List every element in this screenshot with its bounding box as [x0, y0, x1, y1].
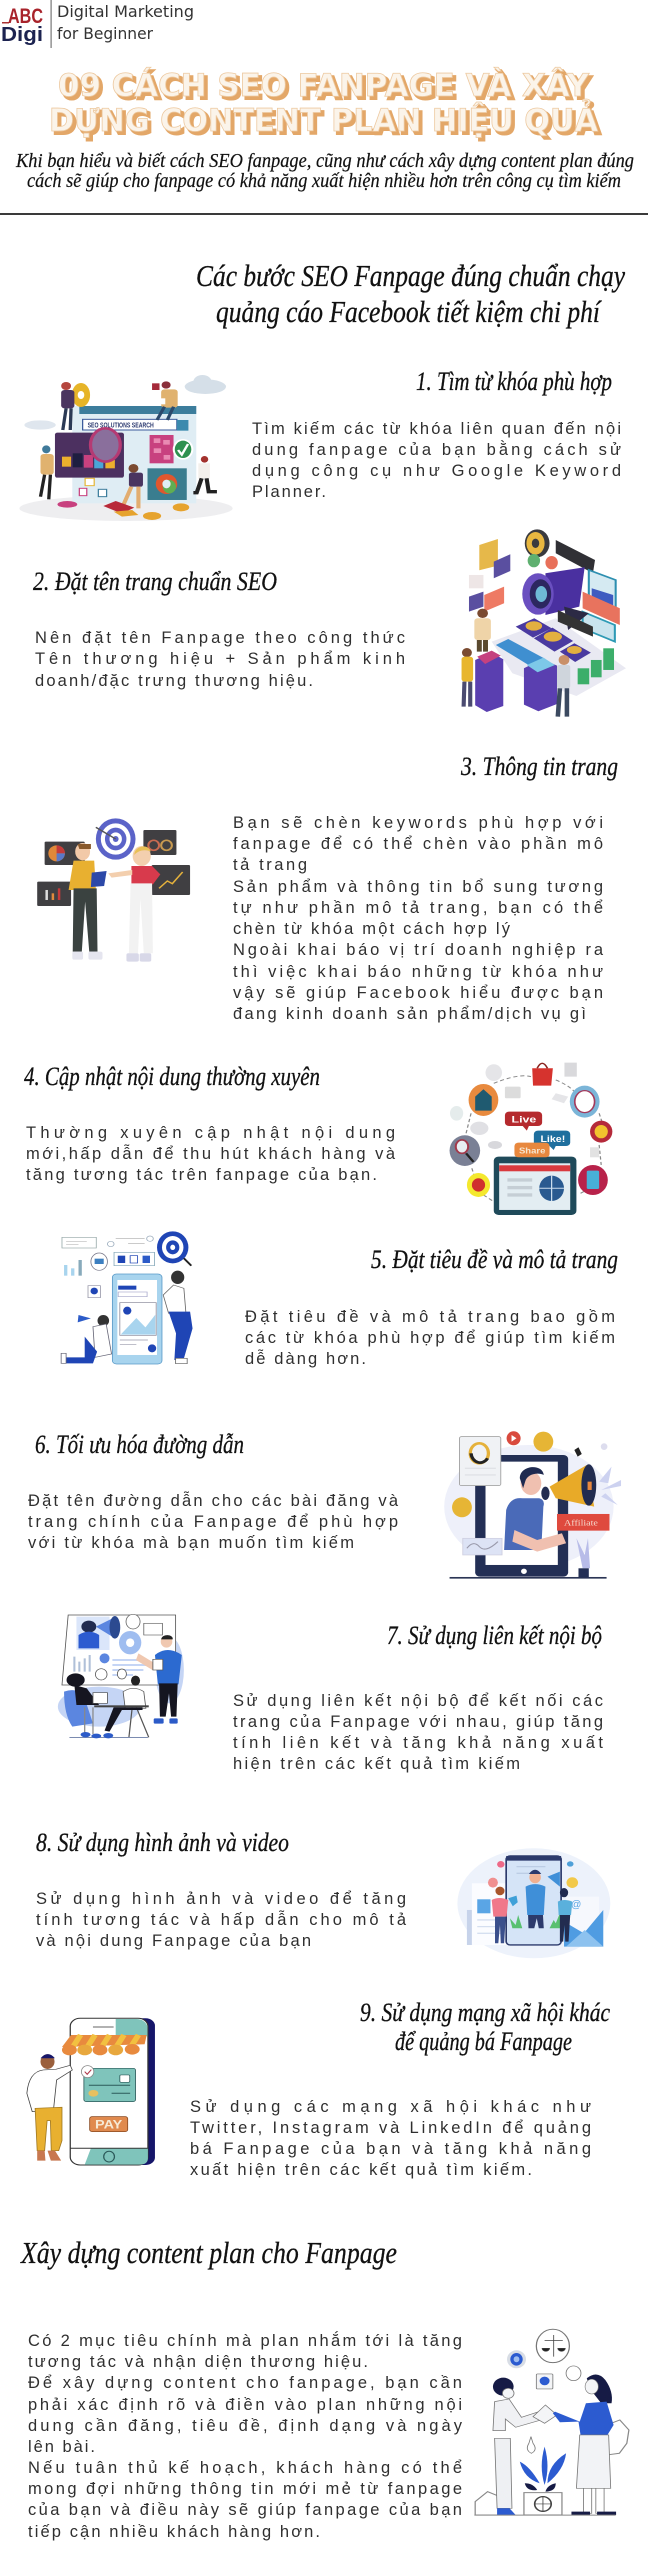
title: 09 CÁCH SEO FANPAGE VÀ XÂY — [61, 71, 593, 107]
icon: social media network illustration: Share — [519, 1146, 546, 1156]
icon: isometric megaphone illustration — [462, 529, 626, 717]
step 6 text: trang chính của Fanpage để phù hợp — [28, 1513, 398, 1531]
section heading — [196, 258, 625, 329]
icon: two women with charts illustration — [37, 818, 190, 962]
content plan text: tương tác và nhận diện thương hiệu. — [28, 2353, 368, 2371]
step 3 text: thì việc khai báo những từ khóa như — [233, 963, 603, 981]
step 5 text — [245, 1308, 615, 1368]
step 7 text: tính liên kết và tăng khả năng xuất — [233, 1734, 603, 1752]
content plan text: Nếu tuân thủ kế hoạch, khách hàng có thể — [28, 2459, 462, 2477]
step 2 text: Nên đặt tên Fanpage theo công thức — [35, 629, 405, 647]
panel: step 3 — [37, 752, 618, 1023]
content plan text: lên bài. — [28, 2438, 95, 2456]
step 7 text: Sử dụng liên kết nội bộ để kết nối các — [233, 1692, 603, 1710]
step 2 text: Tên thương hiệu + Sản phẩm kinh — [35, 650, 405, 668]
content plan heading: Xây dựng content plan cho Fanpage — [19, 2235, 397, 2270]
title: DỰNG CONTENT PLAN HIỆU QUẢ — [52, 103, 601, 142]
step 2 heading: 2. Đặt tên trang chuẩn SEO — [33, 567, 277, 596]
step 4 text — [26, 1124, 396, 1184]
step 3 text: chèn từ khóa một cách hợp lý — [233, 920, 511, 938]
step 6 text: với từ khóa mà bạn muốn tìm kiếm — [28, 1534, 354, 1552]
step 2 text — [35, 629, 405, 690]
content plan text: phải xác định rõ và điền vào plan những nội — [28, 2396, 462, 2414]
content plan text: dung cần đăng, tiêu đề, định dạng và ngày — [28, 2417, 463, 2435]
step 3 text: Ngoài khai báo vị trí doanh nghiệp ra — [233, 941, 604, 959]
icon: SEO search team illustration: SEO SOLUTIONS SEARCH — [88, 421, 154, 429]
step 3 text: Sản phẩm và thông tin bổ sung tương — [233, 878, 603, 896]
step 3 text: vậy sẽ giúp Facebook hiểu được bạn — [233, 984, 603, 1002]
icon: affiliate megaphone illustration: Affiliate — [564, 1519, 598, 1528]
content plan text: Để xây dựng content cho fanpage, bạn cần — [28, 2374, 462, 2392]
step 7 text — [233, 1692, 603, 1773]
step 1 text: Tìm kiếm các từ khóa liên quan đến nội — [252, 420, 621, 438]
panel: step 2 — [33, 529, 626, 717]
content plan text: mong đợi những thông tin mới mẻ từ fanpage — [28, 2480, 462, 2498]
icon: team meeting illustration — [58, 1614, 184, 1738]
panel: step 8 — [36, 1828, 610, 1958]
step 2 text: doanh/đặc trưng thương hiệu. — [35, 672, 313, 690]
step 5 text: các từ khóa phù hợp để giúp tìm kiếm — [245, 1329, 615, 1347]
subtitle — [15, 150, 634, 192]
step 5 text: dễ dàng hơn. — [245, 1349, 366, 1368]
icon: mobile shop payment illustration: PAY — [95, 2118, 122, 2131]
step 4 heading: 4. Cập nhật nội dung thường xuyên — [24, 1062, 320, 1091]
icon: mobile community illustration — [457, 1848, 610, 1958]
step 3 text: tự như phần mô tả trang, bạn có thể — [233, 899, 603, 917]
step 4 text: Thường xuyên cập nhật nội dung — [26, 1124, 395, 1142]
icon: social media network illustration — [450, 1063, 612, 1215]
panel: step 6 — [28, 1430, 621, 1579]
step 3 text: fanpage để có thể chèn vào phần mô — [233, 835, 603, 853]
icon: mobile community illustration: @ — [571, 1899, 581, 1910]
content plan text — [28, 2331, 463, 2541]
content plan text: Có 2 mục tiêu chính mà plan nhắm tới là tăng — [28, 2331, 462, 2350]
panel: content plan — [19, 2235, 629, 2541]
logo — [1, 0, 194, 48]
step 9 text: xuất hiện trên các kết quả tìm kiếm. — [190, 2161, 532, 2179]
step 7 heading: 7. Sử dụng liên kết nội bộ — [387, 1621, 602, 1650]
icon: handshake partnership illustration — [474, 2329, 629, 2516]
content plan text: tiếp cận nhiều khách hàng hơn. — [28, 2523, 320, 2541]
step 9 text: Twitter, Instagram và LinkedIn để quảng — [190, 2119, 591, 2137]
icon: SEO search team illustration — [19, 375, 233, 521]
step 7 text: trang của Fanpage với nhau, giúp tăng — [233, 1713, 603, 1731]
panel: step 1 — [19, 367, 621, 521]
step 4 text: tăng tương tác trên fanpage của bạn. — [26, 1166, 377, 1184]
title: 09 CÁCH SEO FANPAGE VÀ XÂY — [58, 68, 590, 104]
step 1 text: Planner. — [252, 483, 326, 501]
title — [49, 68, 601, 142]
panel: step 4 — [24, 1062, 612, 1215]
step 5 text: Đặt tiêu đề và mô tả trang bao gồm — [245, 1308, 615, 1326]
icon: affiliate megaphone illustration — [444, 1431, 621, 1579]
icon: phone marketing illustration — [61, 1231, 193, 1364]
step 8 text: Sử dụng hình ảnh và video để tăng — [36, 1890, 406, 1908]
step 9 heading: để quảng bá Fanpage — [395, 2027, 572, 2056]
step 3 text: Bạn sẽ chèn keywords phù hợp với — [233, 814, 603, 832]
step 7 text: hiện trên các kết quả tìm kiếm — [233, 1755, 520, 1773]
step 9 text: Sử dụng các mạng xã hội khác như — [190, 2098, 591, 2116]
step 1 text: dung fanpage của bạn bằng cách sử — [252, 440, 621, 459]
step 3 text: tả trang — [233, 856, 307, 874]
step 6 text — [28, 1491, 399, 1552]
step 8 text: và nội dung Fanpage của bạn — [36, 1932, 311, 1950]
icon: social media network illustration: Like! — [540, 1134, 565, 1145]
step 8 text — [36, 1890, 407, 1950]
panel: step 5 — [61, 1231, 618, 1368]
panel: step 9 — [27, 1998, 610, 2179]
logo: ABC — [8, 5, 43, 28]
step 9 heading — [360, 1998, 610, 2056]
step 9 text — [190, 2098, 591, 2179]
logo: Digital Marketing — [57, 2, 194, 21]
step 9 text: bá Fanpage của bạn và tăng khả năng — [190, 2140, 591, 2158]
content plan text: của bạn và điều này sẽ giúp fanpage của bạn — [28, 2501, 462, 2519]
panel: step 7 — [58, 1614, 603, 1773]
step 3 text — [233, 814, 604, 1023]
logo: for Beginner — [57, 24, 153, 43]
step 1 text — [252, 420, 621, 501]
step 8 text: tính tương tác và hấp dẫn cho mô tả — [36, 1910, 407, 1929]
step 3 text: đang kinh doanh sản phẩm/dịch vụ gì — [233, 1005, 586, 1023]
step 6 heading: 6. Tối ưu hóa đường dẫn — [35, 1430, 244, 1459]
icon: social media network illustration: Live — [512, 1114, 537, 1125]
step 4 text: mới,hấp dẫn để thu hút khách hàng và — [26, 1144, 396, 1163]
title: DỰNG CONTENT PLAN HIỆU QUẢ — [49, 100, 598, 139]
step 1 text: dụng công cụ như Google Keyword — [252, 462, 621, 480]
icon: mobile shop payment illustration — [27, 2018, 155, 2165]
step 3 heading: 3. Thông tin trang — [460, 752, 618, 781]
logo: Digi — [1, 24, 43, 46]
step 6 text: Đặt tên đường dẫn cho các bài đăng và — [28, 1491, 399, 1510]
step 8 heading: 8. Sử dụng hình ảnh và video — [36, 1828, 289, 1857]
